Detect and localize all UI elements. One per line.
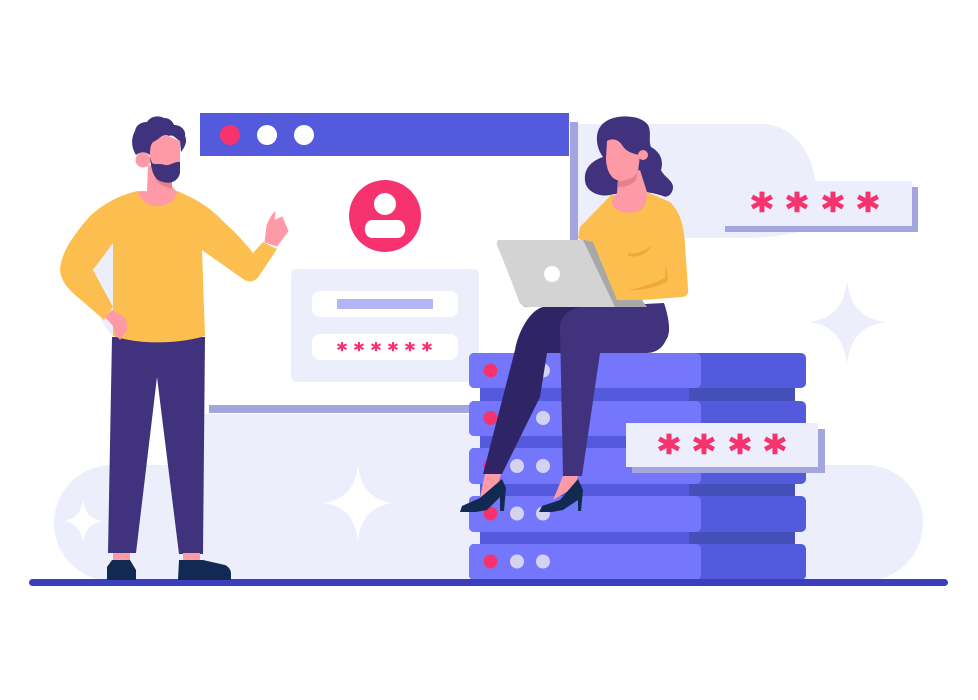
woman [460,116,688,512]
password mask: * [371,339,381,361]
password card: on server: * [693,427,715,475]
laptop [497,240,647,307]
man: left hand [105,310,127,340]
background blobs [54,124,923,581]
password card: on server: * [658,427,680,475]
man: pants [108,337,205,554]
woman: far leg [483,307,600,474]
man: sweater [60,191,277,342]
star: centre [324,465,392,541]
password card: upper right: * [822,185,844,233]
star: right [810,281,885,364]
server row 3 [469,448,806,484]
man: ear [136,152,150,168]
password card: on server: * [729,427,751,475]
login form panel [291,269,479,382]
password card: upper right [725,181,918,233]
password card: on server: * [764,427,786,475]
server row 2 [469,401,806,436]
server row 1 [469,353,806,388]
window header bar [200,113,569,156]
man: ankles [113,553,200,561]
woman: sweater [578,192,688,302]
password card: upper right: * [857,185,879,233]
man: shoes [107,560,231,580]
woman: face [606,139,640,180]
password mask: * [354,339,364,361]
password mask: * [337,339,347,361]
password mask: * [388,339,398,361]
woman: sweater creases [628,245,668,290]
man: right hand [265,212,288,246]
floor line [29,579,948,586]
password mask [337,339,432,361]
server row 5 [469,544,806,580]
password card: upper right: * [751,185,773,233]
woman: shoes [460,479,583,512]
server row 4 [469,496,806,532]
password card: upper right: * [786,185,808,233]
woman: ear [638,150,648,160]
password mask: * [405,339,415,361]
man: beard [150,157,180,183]
star: left [65,500,102,542]
woman: near leg [560,303,669,476]
man [60,116,288,580]
login window [200,113,578,413]
icon: user avatar [349,180,421,252]
man: hair [132,116,186,155]
password mask: * [422,339,432,361]
server stack [469,353,806,580]
man: neck [138,165,177,206]
woman: neck [612,170,647,213]
woman: ankles [480,474,578,500]
password card: on server [626,423,825,475]
woman: hair [585,116,673,197]
man: face [150,135,180,172]
